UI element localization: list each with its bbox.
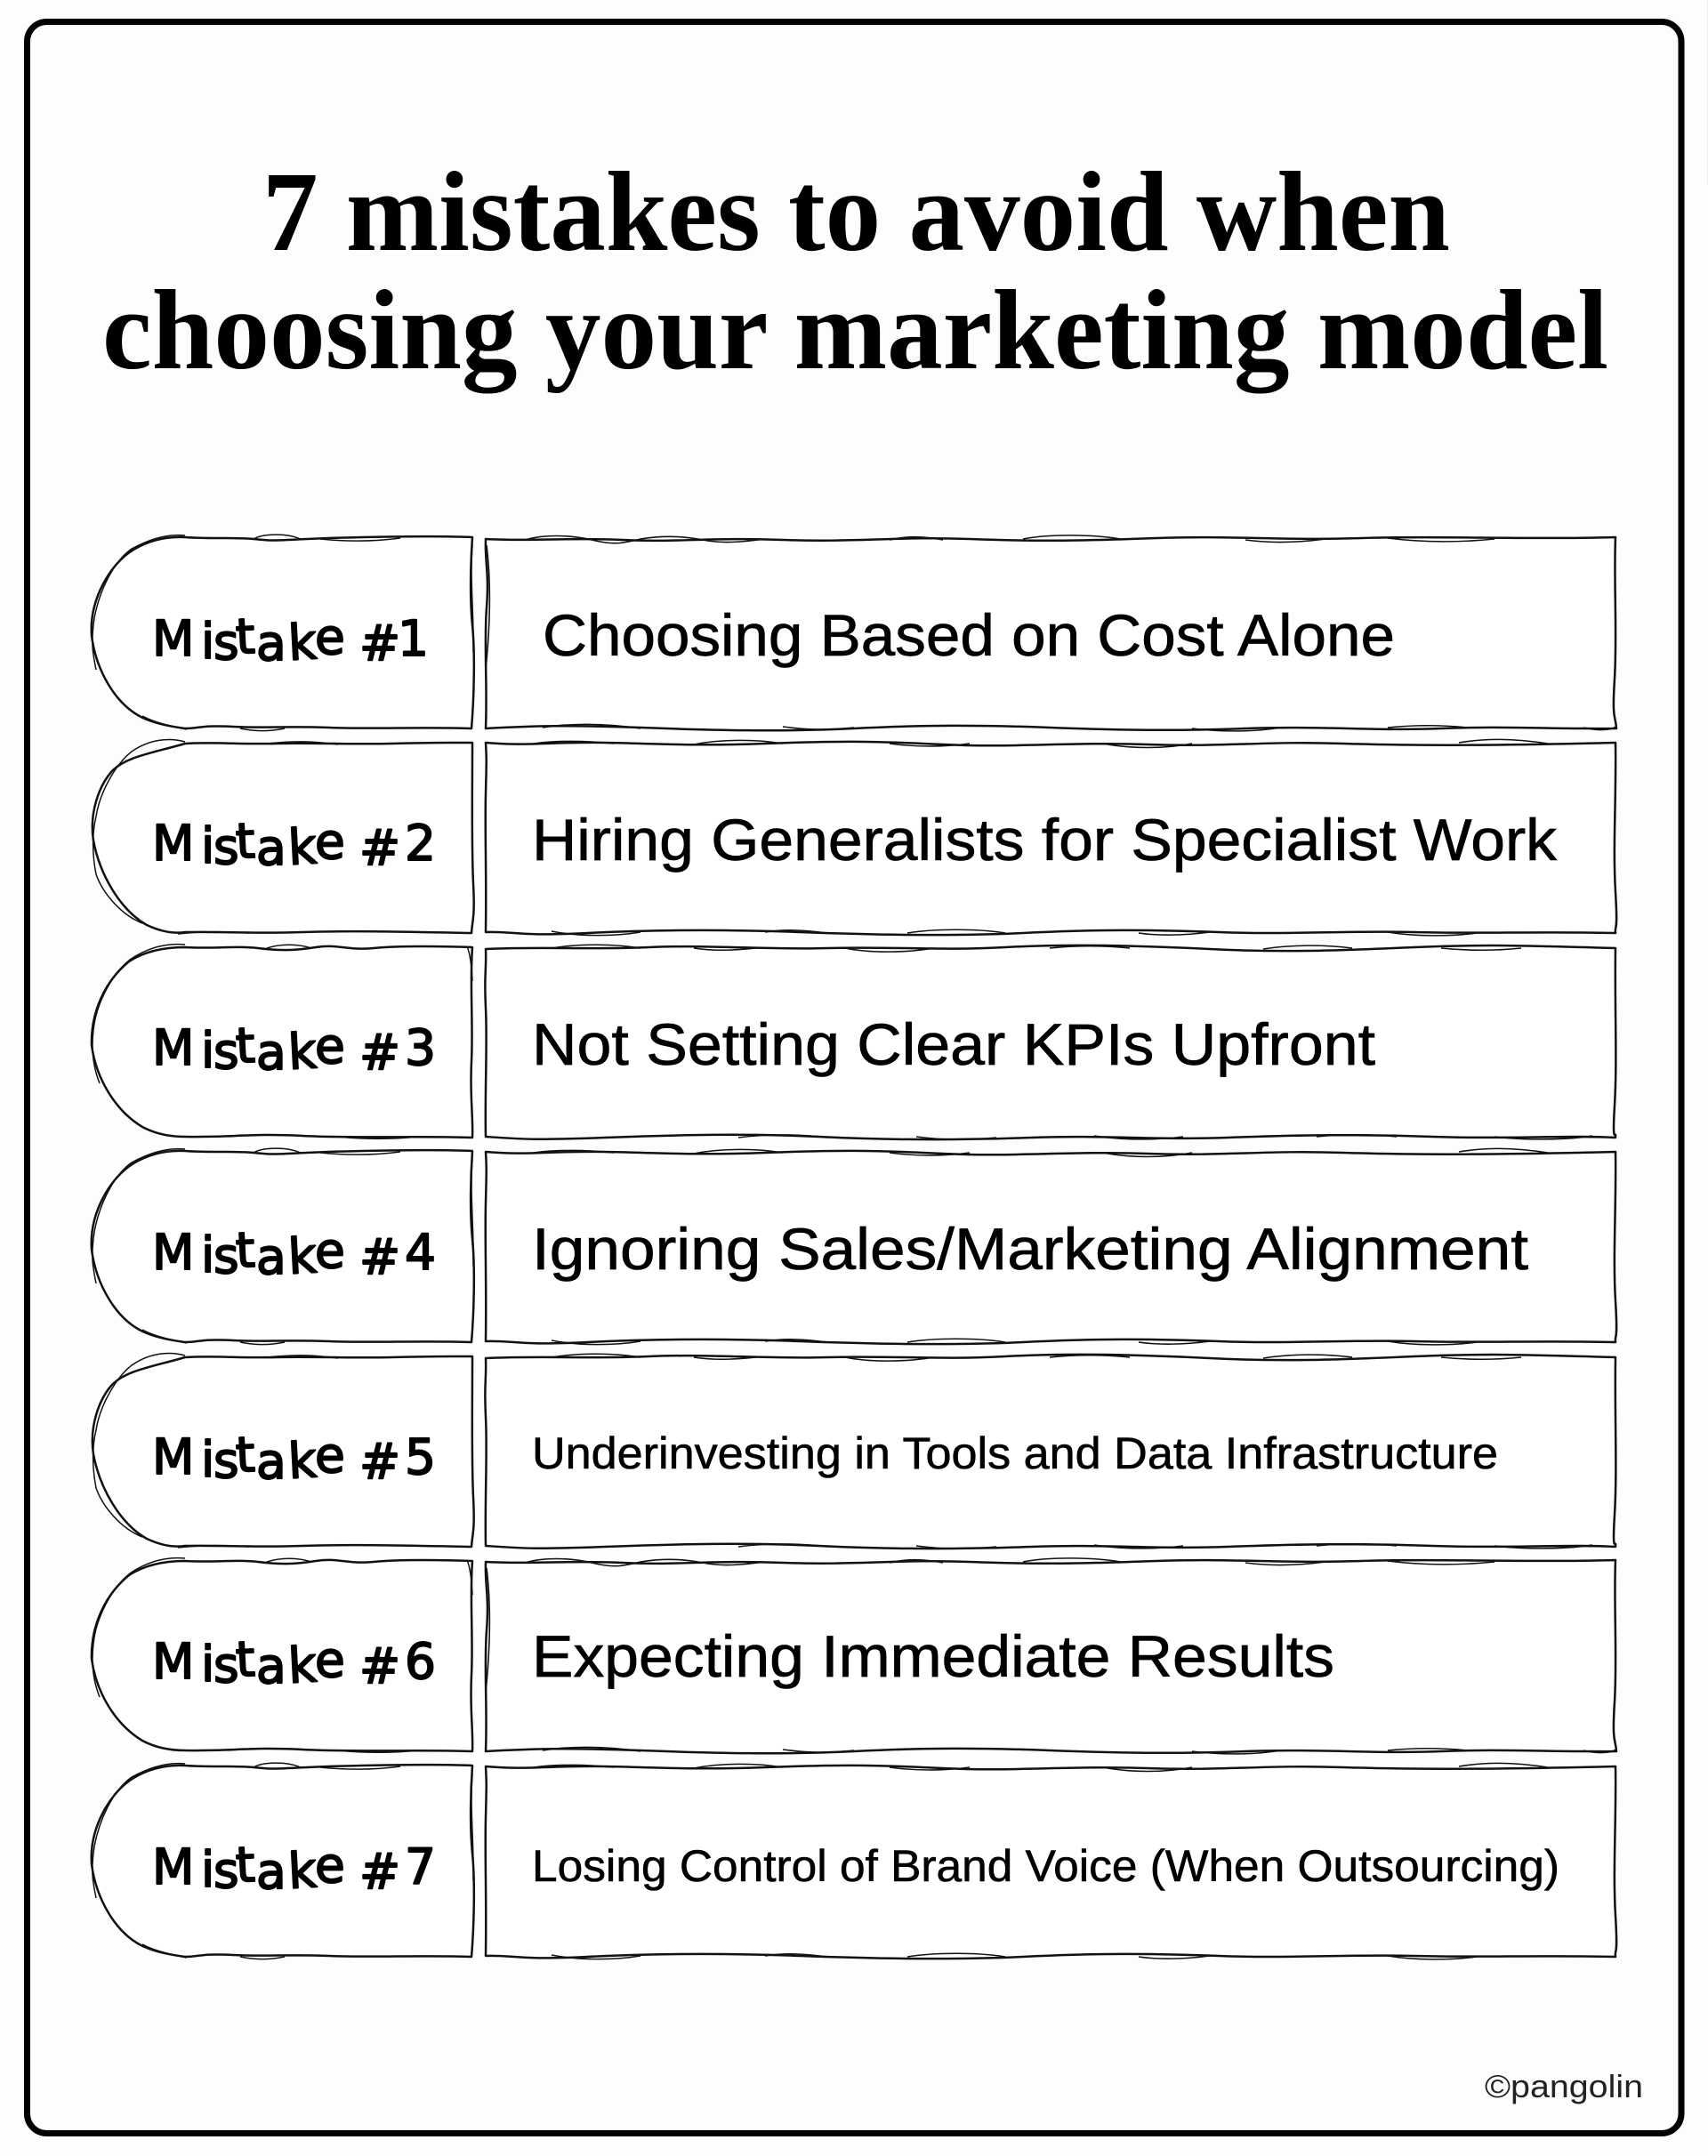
row 7 box [486,1763,1616,1959]
row 4 [92,1148,1616,1345]
row 2 [93,739,1616,936]
row 7 label shape [92,1763,474,1959]
row 7 text: Losing Control of Brand Voice (When Outsourcing) [532,1841,1559,1891]
row 4 box [486,1148,1616,1345]
row 3 box [485,945,1615,1139]
row 6 box [486,1558,1616,1754]
title: 7 mistakes to avoid when [262,149,1450,275]
row 1 label shape [92,535,474,731]
row 3 label shape [92,945,472,1138]
row 1 [92,535,1616,731]
title: choosing your marketing model [102,267,1608,393]
row 6 text: Expecting Immediate Results [532,1623,1334,1689]
row 6 label shape [92,1558,472,1752]
row 1 box [486,535,1616,731]
row 4 label shape [92,1148,474,1345]
row 3 [92,945,1615,1139]
row 1 label: Mistake #1 [152,607,429,672]
row 2 label shape [93,740,474,934]
row 2 label: Mistake #2 [152,812,436,876]
row 5 box [485,1354,1615,1549]
row 4 label: Mistake #4 [152,1221,436,1285]
title [102,149,1608,393]
copyright: ©pangolin [1485,2068,1643,2104]
row 5 label: Mistake #5 [152,1426,436,1490]
row 7 [92,1763,1616,1959]
row 1 text: Choosing Based on Cost Alone [543,602,1395,668]
faint edge line [1707,0,1708,185]
row 5 text: Underinvesting in Tools and Data Infrastructure [532,1428,1498,1478]
row 6 label: Mistake #6 [152,1630,436,1694]
row 5 [93,1354,1615,1549]
row 2 text: Hiring Generalists for Specialist Work [532,807,1558,873]
row 5 label shape [93,1354,474,1548]
row 3 label: Mistake #3 [152,1017,436,1081]
row 7 label: Mistake #7 [152,1836,436,1900]
row 3 text: Not Setting Clear KPIs Upfront [532,1011,1375,1077]
row 2 box [486,739,1616,936]
row 6 [92,1558,1616,1754]
row 4 text: Ignoring Sales/Marketing Alignment [532,1216,1528,1282]
